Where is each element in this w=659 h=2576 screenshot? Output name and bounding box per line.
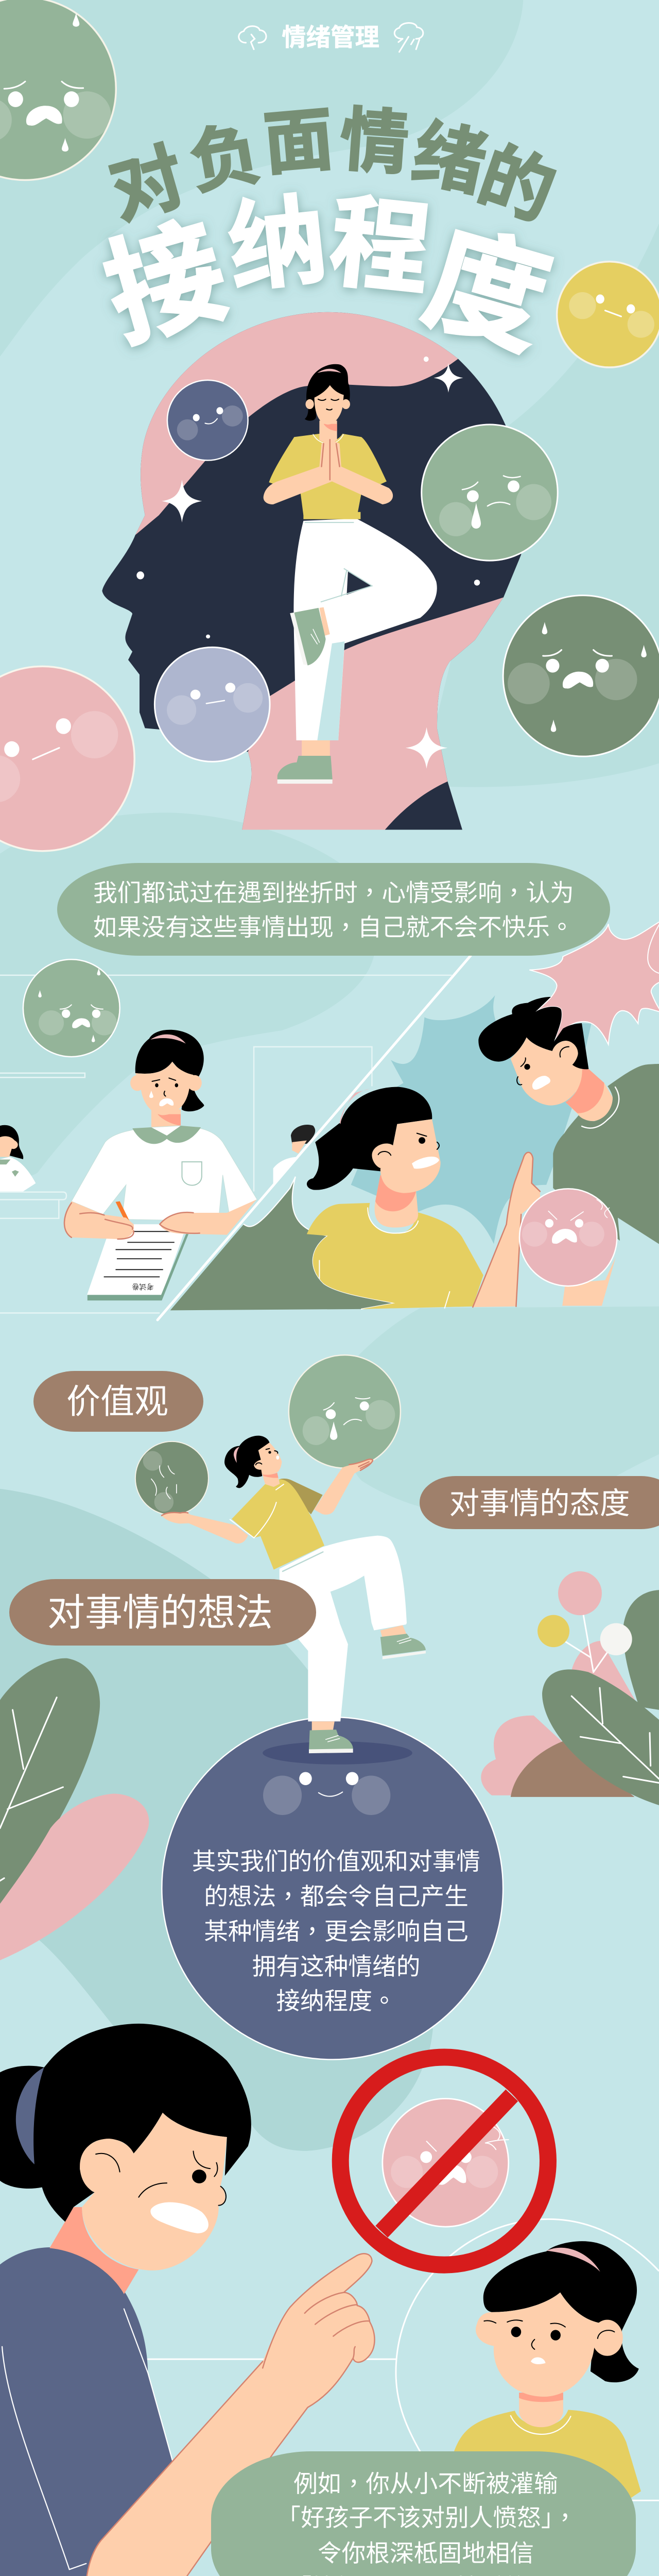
title: two arched lines <box>92 100 565 372</box>
plants and decorative leaves <box>0 1571 659 1960</box>
panel: teal spiky backdrop <box>351 995 592 1244</box>
yellow shirt <box>230 1480 324 1570</box>
title line two: 度 <box>411 211 563 372</box>
title line one: 绪 <box>406 111 493 206</box>
arguing man with anger burst <box>478 921 659 1244</box>
speech pill: example text <box>211 2451 636 2576</box>
right plants and balloons <box>481 1571 659 1805</box>
speech pill: intro text <box>57 863 610 956</box>
exam girl <box>64 1030 257 1300</box>
bubble text: 的想法，都会令自己产生 <box>204 1883 469 1910</box>
lower legs and standing foot <box>280 1623 407 1753</box>
title line one: 对 <box>101 135 194 234</box>
emotion ball: sad green <box>0 0 116 180</box>
raised foot shoe <box>380 1625 426 1659</box>
smiling bubble with text backing <box>162 1717 503 2060</box>
room lines <box>147 2219 659 2500</box>
title line one: 负 <box>184 114 266 203</box>
listening child <box>454 2241 641 2501</box>
title line two <box>92 185 563 372</box>
emotion ball: crying green <box>422 425 558 561</box>
comic divider line <box>158 956 471 1320</box>
illustration: meditating woman inside head silhouette with emotion balls <box>0 0 659 851</box>
label pill: values: 价值观 <box>66 1382 168 1420</box>
label pill: thoughts: 对事情的想法 <box>47 1592 273 1634</box>
bubble text: 其实我们的价值观和对事情 <box>192 1848 480 1875</box>
speech pill: example text: 「好孩子不该对别人愤怒」， <box>276 2504 577 2531</box>
title line two: 纳 <box>223 185 332 304</box>
pink upper wave <box>135 312 458 535</box>
small back students <box>0 1125 315 1192</box>
emotion ball: dark green held low <box>135 1442 209 1515</box>
illustration: exam classroom and scolded girl comic panels <box>0 921 659 1320</box>
head and hair <box>224 1436 282 1488</box>
room lines <box>0 975 452 1313</box>
header: category label with cloud icons <box>239 23 423 52</box>
scolded girl <box>307 1087 483 1309</box>
pink lower wave <box>242 598 504 829</box>
title line one: 的 <box>469 134 565 235</box>
emotion ball: neutral lilac <box>154 647 270 761</box>
bubble text <box>192 1848 480 2014</box>
title line one: 面 <box>261 100 337 184</box>
woman in tree pose <box>264 364 437 784</box>
anger burst <box>529 921 659 1044</box>
bubble text: 接纳程度。 <box>276 1988 396 2014</box>
hand holding angry ball <box>473 1153 617 1307</box>
icon: storm cloud <box>394 23 423 52</box>
speech pill: example text: 例如，你从小不断被灌输 <box>293 2470 558 2497</box>
dark green spiky shape behind scolded girl <box>170 1177 395 1310</box>
head silhouette <box>102 312 523 829</box>
emotion ball: worried dark green <box>503 596 659 756</box>
title line one: 情 <box>337 100 411 183</box>
label pill: attitude <box>420 1476 659 1529</box>
emotion ball: happy slate <box>167 380 248 461</box>
title line one <box>101 100 565 235</box>
test paper caption: 考试卷 <box>132 1282 154 1291</box>
right arm and hand <box>314 1459 373 1515</box>
pointing arm <box>86 2253 375 2576</box>
bubble text: 拥有这种情绪的 <box>252 1953 420 1980</box>
speech pill: intro text: 如果没有这些事情出现，自己就不会不快乐。 <box>93 914 574 941</box>
emotion ball: neutral yellow <box>557 262 659 367</box>
label pill: thoughts <box>9 1579 316 1646</box>
emotion ball: neutral pink <box>0 666 134 851</box>
label pill: values <box>33 1371 203 1432</box>
emotion ball: small worried green <box>23 959 120 1057</box>
scolding mother <box>0 2024 251 2576</box>
left leaves <box>0 1658 149 1960</box>
speech pill: example text: 令你根深柢固地相信 <box>318 2540 534 2567</box>
prohibited angry ball <box>340 2057 548 2265</box>
illustration: mother pointing at prohibited anger, child listening <box>0 2024 659 2576</box>
sparkles and dots <box>136 357 480 769</box>
speech pill: intro text: 我们都试过在遇到挫折时，心情受影响，认为 <box>93 879 574 906</box>
emotion ball: crying green held up <box>289 1355 401 1468</box>
illustration: girl balancing emotion balls <box>135 1355 503 2060</box>
bubble text: 某种情绪，更会影响自己 <box>204 1918 469 1945</box>
icon: cloud with lightning <box>239 26 266 49</box>
title line two: 接 <box>92 205 241 363</box>
back sleeve <box>279 1479 323 1514</box>
pants <box>280 1536 407 1623</box>
title line two: 程 <box>324 185 436 308</box>
left arm and hand <box>162 1513 248 1544</box>
category label: 情绪管理 <box>282 24 379 52</box>
icon: no sign <box>340 2057 548 2265</box>
label pill: attitude: 对事情的态度 <box>449 1487 630 1520</box>
